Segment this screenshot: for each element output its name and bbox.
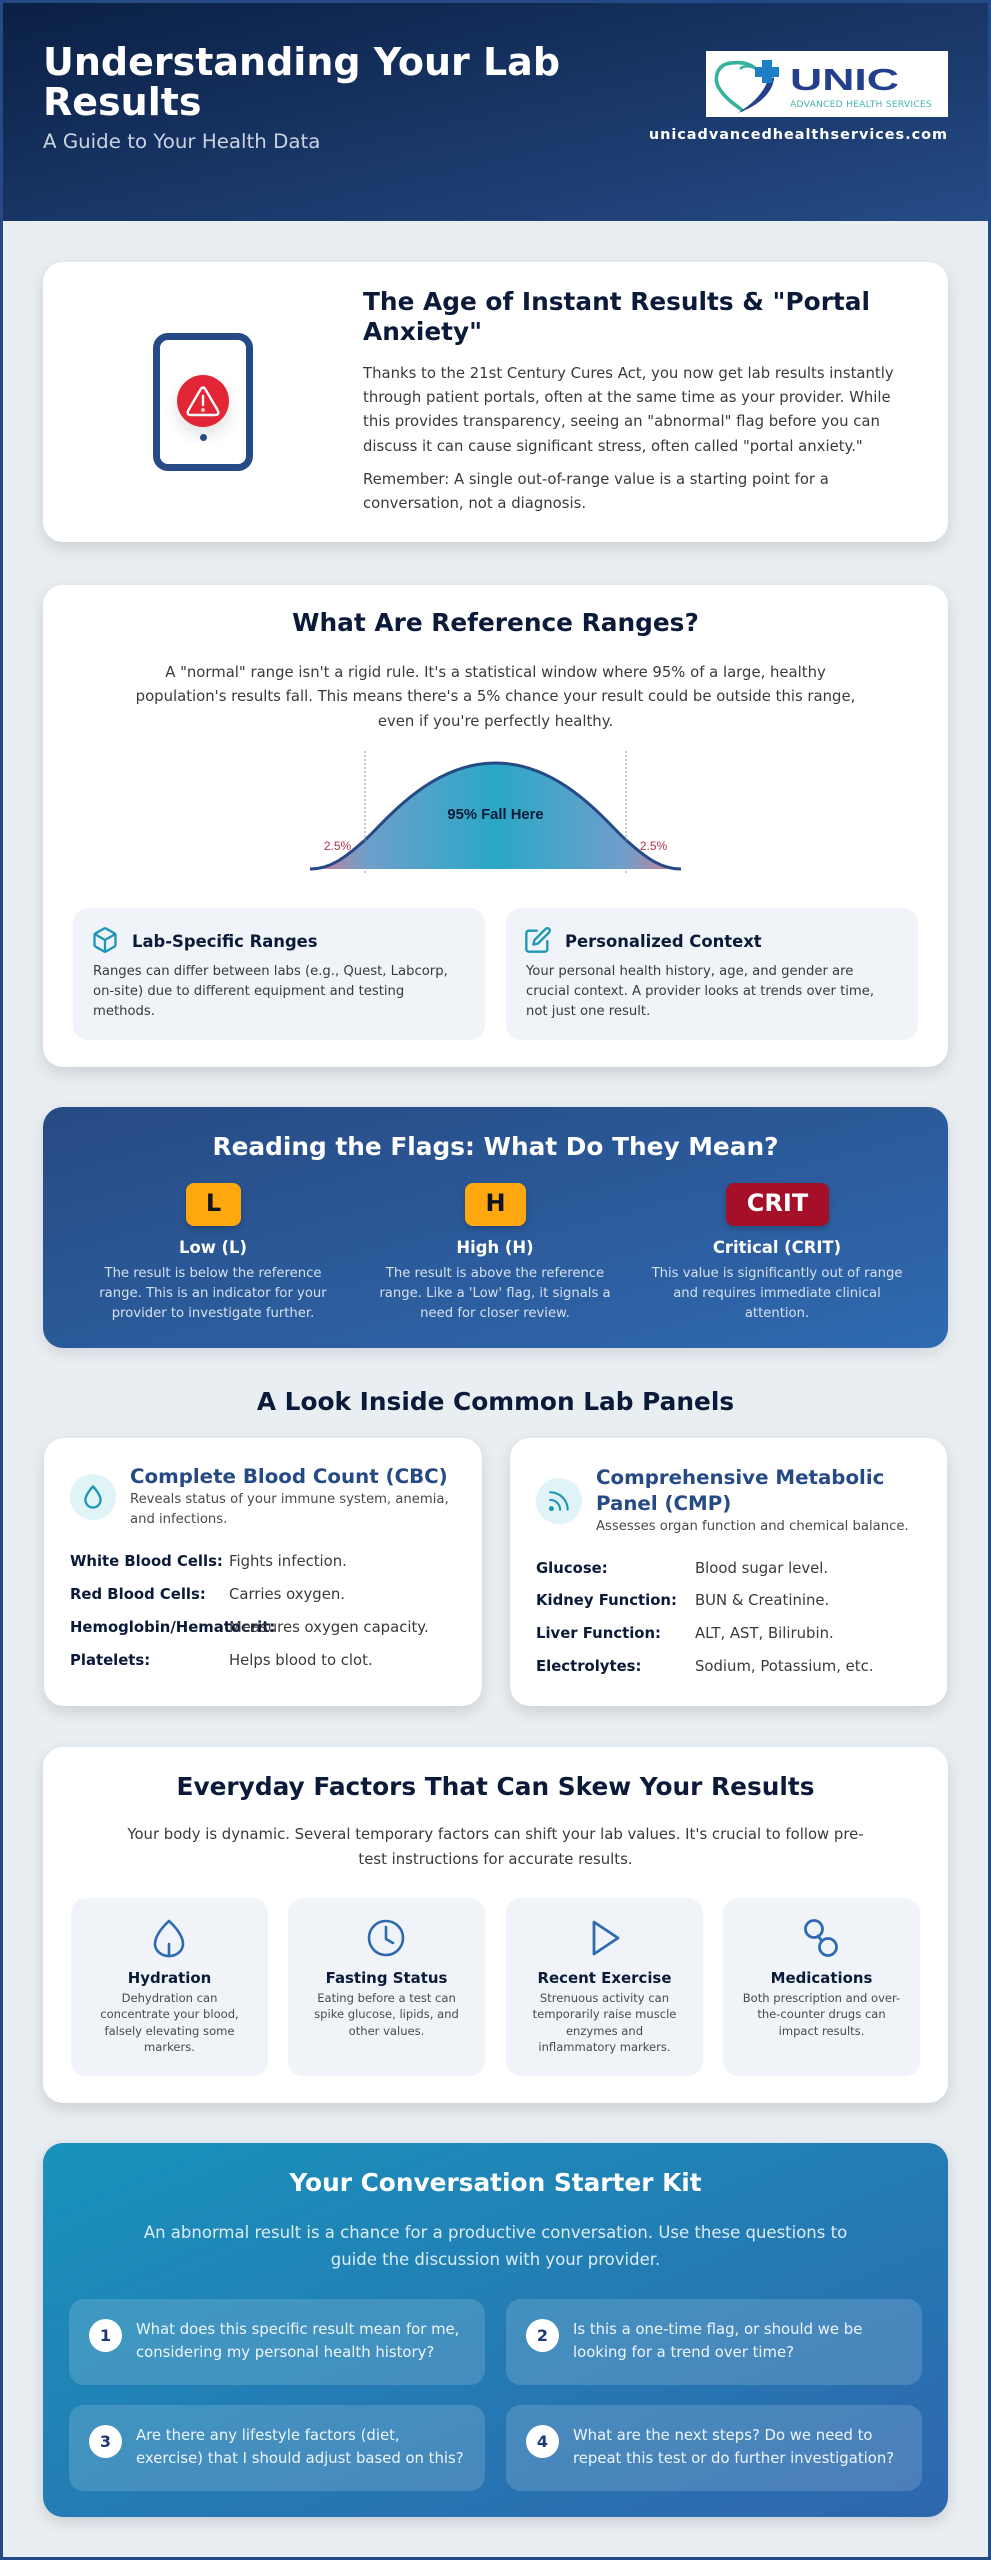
intro text: test instructions for accurate results.: [358, 1850, 633, 1868]
factor text: enzymes and: [566, 2024, 643, 2038]
factor text: concentrate your blood,: [100, 2007, 239, 2021]
row: white blood cells: White Blood Cells:: [70, 1552, 223, 1570]
text: critical: and requires immediate clinical: [673, 1286, 881, 1300]
factor text: temporarily raise muscle: [533, 2007, 676, 2021]
title: Results: [43, 80, 202, 124]
number 4: 4: [537, 2432, 548, 2451]
row: hemoglobin: Hemoglobin/Hematocrit:: [70, 1618, 275, 1636]
text: critical: This value is significantly out of range: [652, 1266, 902, 1280]
title: [43, 40, 560, 124]
number 1: 1: [100, 2326, 111, 2345]
icon: phone with alert: [153, 333, 253, 471]
row: red blood cells: [70, 1585, 345, 1603]
text: low: [99, 1266, 327, 1320]
factor text: [532, 1991, 676, 2054]
row: white blood cells: Fights infection.: [229, 1552, 347, 1570]
row: glucose: [536, 1559, 828, 1577]
panel description: [130, 1492, 449, 1527]
number 2: 2: [537, 2326, 548, 2345]
icon: edit: [525, 927, 551, 953]
heading: Your Conversation Starter Kit: [289, 2168, 702, 2197]
factor: medications: [723, 1898, 920, 2076]
row: electrolytes: Electrolytes:: [536, 1657, 641, 1675]
row: platelets: Platelets:: [70, 1651, 150, 1669]
row: hemoglobin: Measures oxygen capacity.: [229, 1618, 429, 1636]
logo: [706, 51, 948, 117]
text: low: range. This is an indicator for your: [99, 1286, 327, 1300]
panel: comprehensive metabolic panel: [510, 1438, 947, 1706]
panel: everyday factors: [43, 1747, 948, 2103]
row: hemoglobin: [70, 1618, 429, 1636]
card text: [93, 964, 448, 1018]
row: kidney function: Kidney Function:: [536, 1591, 677, 1609]
row: platelets: Helps blood to clot.: [229, 1651, 373, 1669]
question text: What are the next steps? Do we need to: [573, 2426, 872, 2444]
factor title: Recent Exercise: [538, 1969, 671, 1987]
text: high: need for closer review.: [420, 1306, 570, 1320]
row: liver function: ALT, AST, Bilirubin.: [695, 1624, 834, 1642]
icon: rss: [536, 1478, 582, 1524]
card heading: Personalized Context: [565, 932, 762, 950]
panel: conversation starter kit: [43, 2143, 948, 2517]
question text: Is this a one-time flag, or should we be: [573, 2320, 862, 2338]
panel title: Comprehensive Metabolic: [596, 1466, 884, 1489]
row: electrolytes: Sodium, Potassium, etc.: [695, 1657, 874, 1675]
icon: box: [93, 927, 117, 953]
flag: high: H: [485, 1189, 506, 1217]
icon: linked circles: [804, 1919, 838, 1957]
phone home dot: [200, 434, 206, 441]
intro text: A "normal" range isn't a rigid rule. It's a statistical window where 95% of a large, healthy: [165, 663, 826, 681]
row: kidney function: [536, 1591, 829, 1609]
text: low: The result is below the reference: [105, 1266, 321, 1280]
question 4: [506, 2405, 922, 2491]
chart label: left tail: 2.5%: [324, 839, 352, 853]
factor text: Both prescription and over-: [743, 1991, 900, 2005]
factor text: spike glucose, lipids, and: [314, 2007, 459, 2021]
body text: this provides transparency, seeing an "abnormal" flag before you can: [363, 412, 880, 430]
intro text: population's results fall. This means there's a 5% chance your result could be outside this range,: [136, 687, 855, 705]
card text: Ranges can differ between labs (e.g., Quest, Labcorp,: [93, 964, 448, 978]
text: high: range. Like a 'Low' flag, it signals a: [379, 1286, 611, 1300]
body text: [362, 364, 894, 455]
factor text: other values.: [349, 2024, 424, 2038]
intro text: even if you're perfectly healthy.: [378, 712, 613, 730]
card: personalized context: [506, 908, 918, 1040]
card text: not just one result.: [526, 1004, 650, 1018]
row: liver function: [536, 1624, 834, 1642]
text: high: [379, 1266, 611, 1320]
panel title: [596, 1466, 884, 1515]
chart label: centre: 95% Fall Here: [447, 807, 544, 823]
intro text: Your body is dynamic. Several temporary factors can shift your lab values. It's crucial to follow pre-: [127, 1825, 864, 1843]
heading: Anxiety": [363, 317, 482, 346]
question 3: [69, 2405, 485, 2491]
flag: high: [465, 1183, 526, 1226]
logo tagline: ADVANCED HEALTH SERVICES: [790, 99, 932, 110]
reminder text: conversation, not a diagnosis.: [363, 494, 586, 512]
intro text: An abnormal result is a chance for a productive conversation. Use these questions to: [144, 2223, 847, 2242]
question text: repeat this test or do further investigation?: [573, 2449, 894, 2467]
text: critical: [652, 1266, 902, 1320]
panel description: Reveals status of your immune system, anemia,: [130, 1492, 449, 1507]
chart: bell curve: [310, 751, 681, 873]
question text: [136, 2426, 464, 2467]
heading: lab panels: A Look Inside Common Lab Panels: [257, 1387, 734, 1416]
number 1: [89, 2319, 122, 2352]
factor: fasting: [288, 1898, 485, 2076]
label: critical: Critical (CRIT): [713, 1238, 841, 1257]
text: high: The result is above the reference: [386, 1266, 604, 1280]
text: critical: attention.: [745, 1306, 809, 1320]
card text: on-site) due to different equipment and testing: [93, 984, 404, 998]
body text: Thanks to the 21st Century Cures Act, you now get lab results instantly: [363, 364, 894, 382]
heading: [363, 287, 870, 346]
row: electrolytes: [536, 1657, 874, 1675]
factor text: impact results.: [779, 2024, 864, 2038]
icon: play triangle: [592, 1920, 620, 1956]
number 4: [526, 2425, 559, 2458]
icon: clock: [368, 1920, 404, 1956]
factor text: [743, 1991, 900, 2038]
factor text: markers.: [144, 2040, 195, 2054]
flag: critical: CRIT: [747, 1189, 808, 1217]
card: lab-specific ranges: [73, 908, 485, 1040]
question text: [136, 2320, 459, 2361]
row: liver function: Liver Function:: [536, 1624, 661, 1642]
panel title: Panel (CMP): [596, 1492, 731, 1515]
question text: [573, 2426, 894, 2467]
body text: discuss it can cause significant stress, often called "portal anxiety.": [363, 437, 863, 455]
intro text: [144, 2223, 847, 2268]
panel: complete blood count: [44, 1438, 482, 1706]
question text: What does this specific result mean for me,: [136, 2320, 459, 2338]
panel: portal anxiety: [43, 262, 948, 542]
flag: critical: [726, 1183, 829, 1226]
label: low: Low (L): [179, 1238, 247, 1257]
question text: exercise) that I should adjust based on this?: [136, 2449, 464, 2467]
factor text: Eating before a test can: [317, 1991, 456, 2005]
row: kidney function: BUN & Creatinine.: [695, 1591, 829, 1609]
question text: looking for a trend over time?: [573, 2343, 794, 2361]
heading: What Are Reference Ranges?: [292, 608, 699, 637]
number 2: [526, 2319, 559, 2352]
chart label: right tail: 2.5%: [640, 839, 668, 853]
header banner: [0, 0, 991, 221]
panel title: Complete Blood Count (CBC): [130, 1465, 448, 1488]
icon: droplet: [70, 1474, 116, 1520]
question 2: [506, 2299, 922, 2385]
heading: The Age of Instant Results & "Portal: [363, 287, 870, 316]
logo wordmark: UNIC: [790, 63, 899, 97]
intro text: [136, 663, 855, 730]
row: white blood cells: [70, 1552, 347, 1570]
row: red blood cells: Carries oxygen.: [229, 1585, 345, 1603]
panel description: Assesses organ function and chemical balance.: [596, 1519, 909, 1534]
heading: Everyday Factors That Can Skew Your Results: [176, 1772, 814, 1801]
factor title: Medications: [771, 1969, 872, 1987]
intro text: guide the discussion with your provider.: [331, 2250, 660, 2268]
text: low: provider to investigate further.: [112, 1306, 314, 1320]
icon: alert circle: [177, 375, 229, 427]
card text: [526, 964, 874, 1018]
flag: low: [186, 1183, 241, 1226]
title: Understanding Your Lab: [43, 40, 560, 84]
factor text: [314, 1991, 459, 2038]
factor text: falsely elevating some: [104, 2024, 234, 2038]
factor title: Fasting Status: [326, 1969, 447, 1987]
row: glucose: Glucose:: [536, 1559, 608, 1577]
reminder text: Remember: A single out-of-range value is a starting point for a: [363, 470, 829, 488]
body text: through patient portals, often at the same time as your provider. While: [363, 388, 891, 406]
card heading: Lab-Specific Ranges: [132, 932, 318, 950]
card text: crucial context. A provider looks at trends over time,: [526, 984, 874, 998]
factor text: [100, 1991, 239, 2054]
factor: hydration: [71, 1898, 268, 2076]
row: red blood cells: Red Blood Cells:: [70, 1585, 206, 1603]
question text: considering my personal health history?: [136, 2343, 434, 2361]
factor text: Dehydration can: [122, 1991, 217, 2005]
icon: drop: [154, 1920, 184, 1958]
label: high: High (H): [456, 1238, 534, 1257]
heading: Reading the Flags: What Do They Mean?: [212, 1132, 779, 1161]
flag: low: L: [206, 1189, 221, 1217]
factor text: the-counter drugs can: [757, 2007, 886, 2021]
panel: reading the flags: [43, 1107, 948, 1348]
factor title: Hydration: [128, 1969, 211, 1987]
question text: [573, 2320, 862, 2361]
icon: heart and cross: [716, 60, 779, 113]
row: platelets: [70, 1651, 373, 1669]
factor text: inflammatory markers.: [538, 2040, 671, 2054]
intro text: [127, 1825, 864, 1868]
row: glucose: Blood sugar level.: [695, 1559, 828, 1577]
panel description: and infections.: [130, 1512, 227, 1527]
question text: Are there any lifestyle factors (diet,: [136, 2426, 400, 2444]
subtitle: A Guide to Your Health Data: [43, 130, 320, 153]
card text: Your personal health history, age, and gender are: [526, 964, 853, 978]
reminder text: [363, 470, 829, 512]
website url: unicadvancedhealthservices.com: [649, 127, 948, 143]
factor text: Strenuous activity can: [540, 1991, 669, 2005]
number 3: 3: [100, 2432, 111, 2451]
card text: methods.: [93, 1004, 155, 1018]
panel: reference ranges: [43, 585, 948, 1067]
number 3: [89, 2425, 122, 2458]
factor: exercise: [506, 1898, 703, 2076]
question 1: [69, 2299, 485, 2385]
